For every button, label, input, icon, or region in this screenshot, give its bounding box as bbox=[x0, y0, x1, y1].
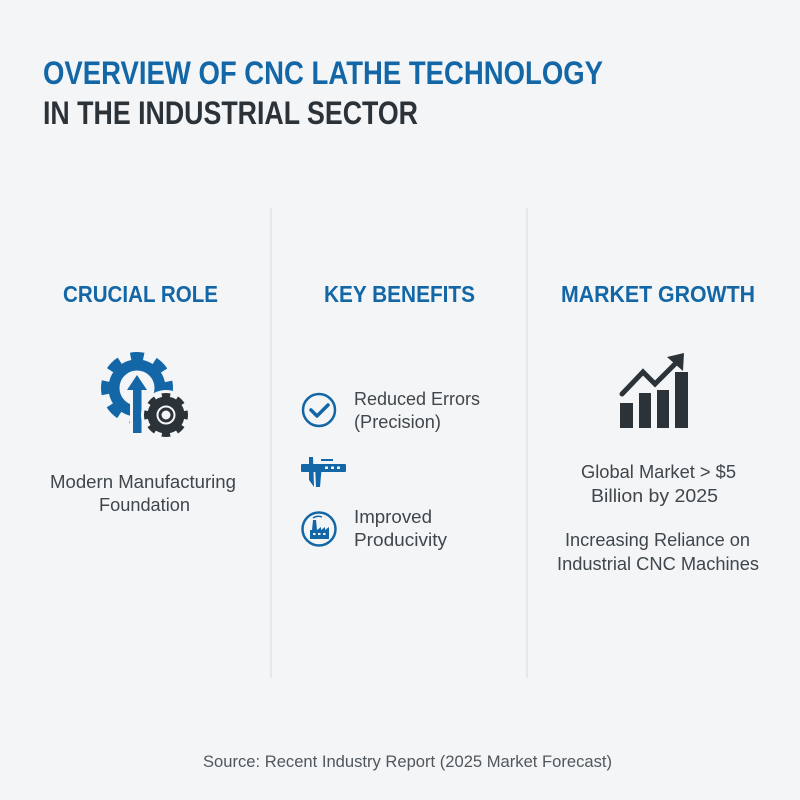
text: increasing reliance bbox=[557, 530, 759, 574]
text: global market bbox=[581, 462, 736, 506]
text: modern manufacturing foundation: Foundation bbox=[99, 495, 190, 515]
text: modern manufacturing foundation bbox=[50, 472, 236, 515]
title bbox=[43, 55, 603, 131]
text: improved productivity: Improved bbox=[354, 507, 432, 527]
panel: market growth bbox=[557, 281, 759, 574]
heading: key benefits: KEY BENEFITS bbox=[324, 281, 475, 307]
title: OVERVIEW OF CNC LATHE TECHNOLOGY bbox=[43, 55, 603, 91]
icon: gear with arrow bbox=[106, 357, 191, 440]
text: reduced errors: (Precision) bbox=[354, 412, 441, 432]
text: global market: Global Market > $5 bbox=[581, 462, 736, 482]
icon: check circle bbox=[303, 394, 335, 426]
text: improved productivity: Producivity bbox=[354, 530, 447, 550]
title: IN THE INDUSTRIAL SECTOR bbox=[43, 95, 418, 131]
icon: caliper bbox=[301, 457, 346, 487]
heading: market growth: MARKET GROWTH bbox=[561, 281, 755, 307]
source note: Source: Recent Industry Report (2025 Market Forecast) bbox=[203, 752, 612, 771]
text: reduced errors: Reduced Errors bbox=[354, 389, 480, 409]
text: improved productivity bbox=[354, 507, 447, 550]
icon: growth chart bbox=[620, 353, 688, 428]
text: global market: Billion by 2025 bbox=[591, 486, 718, 506]
text: increasing reliance: Industrial CNC Machines bbox=[557, 554, 759, 574]
text: increasing reliance: Increasing Reliance on bbox=[565, 530, 750, 550]
text: reduced errors bbox=[354, 389, 480, 432]
panel: crucial role bbox=[50, 281, 236, 515]
panel: key benefits bbox=[301, 281, 480, 550]
icon: factory circle bbox=[302, 512, 336, 546]
text: modern manufacturing foundation: Modern Manufacturing bbox=[50, 472, 236, 492]
heading: crucial role: CRUCIAL ROLE bbox=[63, 281, 218, 307]
